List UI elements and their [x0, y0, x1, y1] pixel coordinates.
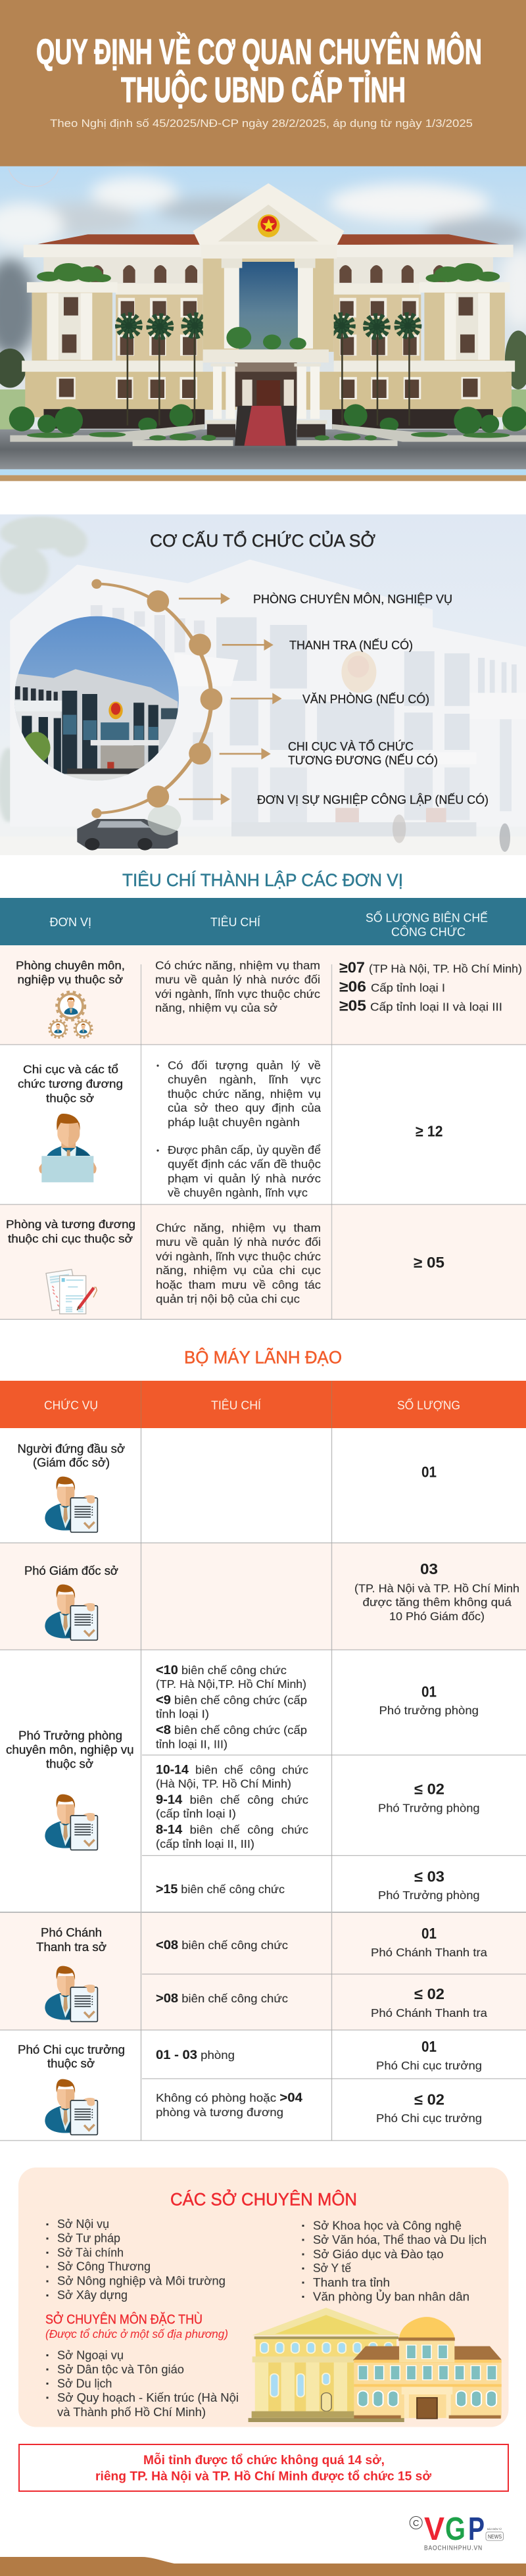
row: phòng thuộc chi cục: hoặc tham mưu về công tác	[156, 1278, 321, 1291]
row: phó trưởng phòng: 01	[421, 1683, 437, 1700]
list: right departments: Thanh tra tỉnh	[313, 2276, 390, 2289]
row: phó trưởng phòng: tỉnh loại I)	[156, 1708, 209, 1721]
logo: VGP: BAOCHINHPHU.VN	[424, 2544, 483, 2552]
subheading: special departments: SỞ CHUYÊN MÔN ĐẶC THÙ	[45, 2312, 203, 2327]
row: phó trưởng phòng: thuộc sở	[46, 1758, 93, 1771]
row: phòng chuyên môn: ≥07	[339, 959, 365, 976]
panel: specialised departments	[18, 2167, 509, 2427]
heading: CƠ CẤU TỔ CHỨC CỦA SỞ	[150, 530, 375, 551]
heading: criteria: TIÊU CHÍ THÀNH LẬP CÁC ĐƠN VỊ	[122, 870, 403, 890]
row: phòng thuộc chi cục: quản trị nội bộ của chi cục	[156, 1293, 300, 1306]
row: phó giám đốc	[24, 1560, 519, 1640]
row: phó trưởng phòng	[6, 1664, 480, 1902]
row: chi cục	[18, 1059, 443, 1199]
row: phòng chuyên môn: Cấp tỉnh loại II và loại III	[370, 1001, 502, 1014]
row: phòng chuyên môn: Cấp tỉnh loại I	[371, 981, 445, 995]
row: phó trưởng phòng: Phó Trưởng phòng	[378, 1889, 480, 1902]
row: phó giám đốc: 03	[420, 1560, 438, 1577]
title: THUỘC UBND CẤP TỈNH	[121, 70, 406, 110]
table: leadership	[0, 1381, 526, 2141]
row: chi cục: phạm vi quản lý nhà nước	[168, 1172, 321, 1185]
row: phòng chuyên môn: ≥06	[339, 978, 366, 995]
title	[36, 32, 482, 110]
row: phó trưởng phòng: >15 biên chế công chức	[156, 1883, 285, 1896]
structure labels: CHI CỤC VÀ TỔ CHỨC	[288, 739, 414, 753]
header band	[0, 0, 526, 166]
row: chi cục: Có đối tượng quản lý về	[168, 1059, 321, 1072]
logo: VGP	[410, 2512, 504, 2552]
callout: Mỗi tỉnh được tổ chức không quá 14 sở,	[143, 2452, 385, 2467]
table header	[0, 898, 526, 945]
icon: person with clipboard	[45, 1966, 97, 2021]
row: phó trưởng phòng: ≤ 03	[414, 1868, 444, 1885]
row: phó chi cục trưởng: phòng và tương đương	[156, 2106, 283, 2119]
table header: SỐ LƯỢNG	[397, 1398, 460, 1412]
structure labels: PHÒNG CHUYÊN MÔN, NGHIỆP VỤ	[253, 592, 452, 606]
table header: ĐƠN VỊ	[50, 916, 91, 929]
icon: person with clipboard	[45, 2079, 97, 2135]
row: phó chánh thanh tra: Phó Chánh	[41, 1926, 102, 1939]
structure labels: THANH TRA (NẾU CÓ)	[289, 638, 413, 652]
table header: TIÊU CHÍ	[211, 1399, 261, 1412]
table header: SỐ LƯỢNG BIÊN CHẾ	[366, 910, 488, 925]
row: phó giám đốc: được tăng thêm không quá	[363, 1596, 512, 1609]
row: phó trưởng phòng: Phó Trưởng phòng	[18, 1729, 122, 1743]
row: phó trưởng phòng: (Hà Nội, TP. Hồ Chí Minh)	[156, 1777, 291, 1790]
logo: VGP: V	[424, 2512, 444, 2547]
list: special departments	[46, 2348, 239, 2419]
list: right departments: Sở Văn hóa, Thể thao và Du lịch	[313, 2233, 487, 2246]
subheading: special departments	[45, 2312, 228, 2341]
list: left departments: Sở Nội vụ	[57, 2217, 109, 2231]
structure labels: ĐƠN VỊ SỰ NGHIỆP CÔNG LẬP (NẾU CÓ)	[257, 793, 489, 806]
structure labels: TƯƠNG ĐƯƠNG (NẾU CÓ)	[288, 753, 438, 767]
row: phó chi cục trưởng: Phó Chi cục trưởng	[18, 2043, 125, 2056]
row: phòng chuyên môn: nghiệp vụ thuộc sở	[17, 973, 123, 986]
list: left departments: Sở Nông nghiệp và Môi trường	[57, 2275, 226, 2288]
row: chi cục: thuộc chức năng, nhiệm vụ	[168, 1087, 321, 1101]
row: chi cục: chuyên ngành, lĩnh vực	[168, 1073, 321, 1086]
photo circle	[13, 616, 181, 781]
row: chi cục: Được phân cấp, ủy quyền để	[168, 1143, 321, 1156]
row: phòng chuyên môn: với ngành, lĩnh vực thuộc chức	[155, 987, 320, 1001]
table header	[0, 1381, 526, 1428]
icon: documents and pen	[46, 1270, 97, 1314]
row: chi cục: chức tương đương	[18, 1077, 123, 1091]
list: right departments: Sở Giáo dục và Đào tạo	[313, 2248, 443, 2261]
list: left departments	[46, 2217, 226, 2302]
faded building background	[0, 514, 526, 855]
row: chi cục: về chuyên ngành, lĩnh vực	[168, 1186, 308, 1199]
logo: VGP: G	[445, 2512, 466, 2547]
row: chi cục: ≥ 12	[416, 1122, 443, 1139]
row: phó chánh thanh tra: <08 biên chế công chức	[156, 1939, 288, 1952]
building left wing	[9, 234, 237, 442]
row: phó chi cục trưởng: 01	[421, 2038, 437, 2055]
grid	[0, 1428, 526, 2141]
row: chi cục: quyết định các vấn đề thuộc	[168, 1158, 321, 1171]
row: phó trưởng phòng: <10 biên chế công chức	[156, 1664, 287, 1677]
row: phó trưởng phòng: <8 biên chế công chức (cấp	[156, 1723, 307, 1737]
icon: person with clipboard	[45, 1795, 97, 1850]
row: chi cục: pháp luật chuyên ngành	[168, 1116, 300, 1129]
list: right departments: Sở Khoa học và Công nghệ	[313, 2219, 462, 2233]
logo: VGP: P	[468, 2512, 485, 2547]
row: phòng thuộc chi cục	[6, 1218, 444, 1314]
row backgrounds	[0, 945, 526, 1320]
table header: CHỨC VỤ	[44, 1398, 98, 1412]
row: phòng thuộc chi cục: ≥ 05	[414, 1254, 444, 1271]
row: phó chánh thanh tra: ≤ 02	[414, 1985, 444, 2002]
icon: person with clipboard	[45, 1477, 97, 1532]
list: special departments: Sở Quy hoạch - Kiến trúc (Hà Nội	[57, 2391, 239, 2404]
row: phó chánh thanh tra: >08 biên chế công chức	[156, 1992, 288, 2006]
illustration: department buildings	[249, 2308, 502, 2422]
row: phó trưởng phòng: chuyên môn, nghiệp vụ	[6, 1743, 134, 1756]
row: phòng chuyên môn	[16, 959, 522, 1037]
row: phó trưởng phòng: <9 biên chế công chức (cấp	[156, 1694, 307, 1708]
subheading: special departments: (Được tổ chức ở một số địa phương)	[45, 2327, 228, 2341]
illustration: provincial people's committee building	[0, 166, 526, 481]
row: phòng chuyên môn: (TP Hà Nội, TP. Hồ Chí Minh)	[369, 962, 522, 976]
row: phòng thuộc chi cục: mưu về quản lý nhà nước đối	[156, 1235, 321, 1249]
list: special departments: Sở Du lịch	[57, 2377, 112, 2390]
panel: organisational structure	[0, 514, 526, 855]
row: phòng chuyên môn: Phòng chuyên môn,	[16, 959, 125, 972]
row: phó trưởng phòng: ≤ 02	[414, 1781, 444, 1798]
list: left departments: Sở Xây dựng	[57, 2289, 128, 2302]
row: phó chánh thanh tra: 01	[421, 1925, 437, 1942]
list: right departments: Sở Y tế	[313, 2262, 351, 2275]
row: phòng chuyên môn: ≥05	[339, 997, 366, 1014]
row: phó trưởng phòng: 10-14 biên chế công chức	[156, 1763, 308, 1777]
row: phòng chuyên môn: mưu về quản lý nhà nước đối	[155, 973, 320, 986]
logo: VGP: BÁO ĐIỆN TỬ	[487, 2527, 502, 2531]
row: phó chi cục trưởng: Phó Chi cục trưởng	[376, 2112, 482, 2125]
list: special departments: Sở Ngoại vụ	[57, 2348, 124, 2362]
row: phó chi cục trưởng	[18, 2038, 482, 2135]
row: phó trưởng phòng: (TP. Hà Nội,TP. Hồ Chí Minh)	[156, 1677, 306, 1691]
row: phó chi cục trưởng: thuộc sở	[47, 2057, 95, 2070]
row: phó trưởng phòng: Phó Trưởng phòng	[378, 1801, 480, 1814]
list: left departments: Sở Tư pháp	[57, 2231, 120, 2244]
table: criteria	[0, 898, 526, 1320]
row: phòng thuộc chi cục: năng, nhiệm vụ của chi cục	[156, 1264, 321, 1277]
icon: gears with people	[49, 992, 92, 1037]
row: phó giám đốc: Phó Giám đốc sở	[24, 1564, 118, 1577]
row: phòng thuộc chi cục: thuộc chi cục thuộc sở	[8, 1232, 133, 1245]
heading: leadership: BỘ MÁY LÃNH ĐẠO	[184, 1347, 342, 1367]
footer band	[0, 2557, 526, 2576]
row: phó trưởng phòng: (cấp tỉnh loại I)	[156, 1807, 236, 1820]
row: giám đốc: 01	[421, 1463, 437, 1480]
list: right departments	[302, 2219, 487, 2303]
row: giám đốc: (Giám đốc sở)	[33, 1456, 110, 1470]
row: chi cục: thuộc sở	[46, 1092, 94, 1105]
row: phó chi cục trưởng: ≤ 02	[414, 2091, 444, 2108]
row: phó trưởng phòng: (cấp tỉnh loại II, III)	[156, 1837, 254, 1850]
callout	[19, 2444, 508, 2491]
row: phó chánh thanh tra: Phó Chánh Thanh tra	[371, 2006, 487, 2019]
row: phó chánh thanh tra	[36, 1925, 487, 2021]
list: left departments: Sở Tài chính	[57, 2246, 124, 2259]
table header: CÔNG CHỨC	[391, 925, 466, 939]
table header: TIÊU CHÍ	[210, 916, 260, 929]
row: giám đốc: Người đứng đầu sở	[17, 1442, 125, 1455]
callout: riêng TP. Hà Nội và TP. Hồ Chí Minh được tổ chức 15 sở	[95, 2469, 431, 2484]
subtitle: Theo Nghị định số 45/2025/NĐ-CP ngày 28/2/2025, áp dụng từ ngày 1/3/2025	[50, 117, 473, 130]
row: phòng chuyên môn: Có chức năng, nhiệm vụ tham	[155, 959, 320, 972]
row: giám đốc	[17, 1442, 437, 1532]
row: phó trưởng phòng: Phó trưởng phòng	[379, 1704, 479, 1717]
row: phó trưởng phòng: 9-14 biên chế công chức	[156, 1793, 308, 1807]
list: left departments: Sở Công Thương	[57, 2260, 151, 2273]
row: phòng thuộc chi cục: Phòng và tương đương	[6, 1218, 135, 1231]
panel heading: CÁC SỞ CHUYÊN MÔN	[170, 2188, 357, 2209]
row: phó trưởng phòng: tỉnh loại II, III)	[156, 1738, 227, 1751]
row: phòng thuộc chi cục: với ngành, lĩnh vực thuộc chức	[156, 1250, 321, 1263]
icon: person holding board	[39, 1114, 97, 1182]
row: phó giám đốc: (TP. Hà Nội và TP. Hồ Chí Minh	[354, 1581, 519, 1595]
list: right departments: Văn phòng Ủy ban nhân dân	[313, 2289, 469, 2303]
icon: person with clipboard	[45, 1585, 97, 1640]
row: phó chi cục trưởng: 01 - 03 phòng	[156, 2048, 235, 2062]
logo: VGP: NEWS	[488, 2533, 502, 2540]
row: phó chi cục trưởng: Không có phòng hoặc >04	[156, 2091, 302, 2105]
row: phó trưởng phòng: 8-14 biên chế công chức	[156, 1823, 308, 1837]
list: special departments: và Thành phố Hồ Chí Minh)	[57, 2406, 206, 2419]
row: phòng thuộc chi cục: Chức năng, nhiệm vụ tham	[156, 1221, 321, 1234]
structure labels: VĂN PHÒNG (NẾU CÓ)	[302, 692, 429, 706]
list: special departments: Sở Dân tộc và Tôn giáo	[57, 2363, 184, 2376]
row: phó giám đốc: 10 Phó Giám đốc)	[389, 1610, 485, 1623]
row: phó chánh thanh tra: Thanh tra sở	[36, 1941, 107, 1954]
logo: VGP: C	[413, 2518, 419, 2528]
row: phòng chuyên môn: năng, nhiệm vụ của sở	[155, 1001, 277, 1014]
row: phó chánh thanh tra: Phó Chánh Thanh tra	[371, 1946, 487, 1959]
arrows	[179, 593, 282, 805]
row: chi cục: của sở theo quy định của	[168, 1101, 321, 1114]
row: chi cục: Chi cục và các tổ	[23, 1063, 118, 1076]
connector arc with nodes	[91, 579, 222, 818]
row: phó chi cục trưởng: Phó Chi cục trưởng	[376, 2059, 482, 2072]
structure labels	[253, 592, 489, 806]
